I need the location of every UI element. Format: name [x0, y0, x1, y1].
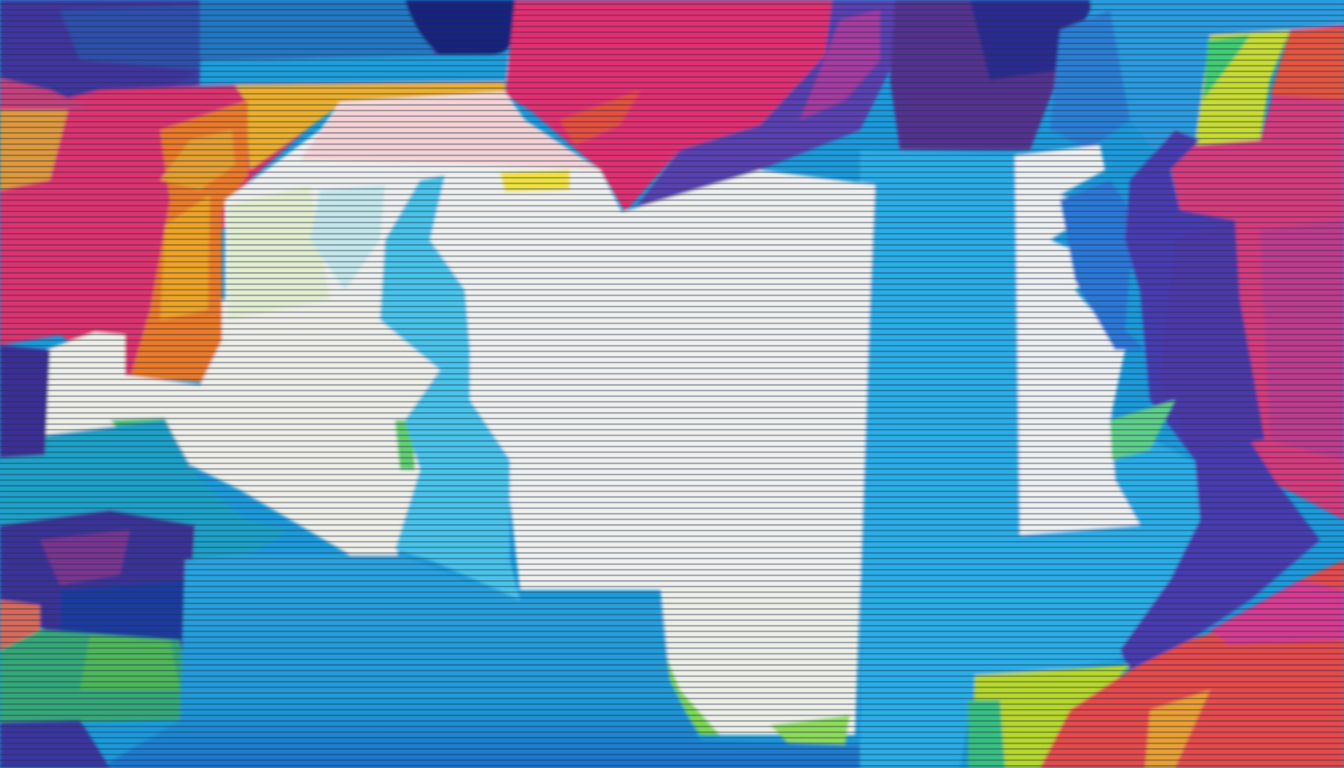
- right purple column: [1120, 130, 1320, 670]
- green lower left: [0, 630, 190, 722]
- lower right yellow green: [970, 665, 1130, 768]
- top pink shape: [505, 0, 832, 212]
- top-left indigo block: [0, 0, 440, 105]
- green right accent: [1110, 400, 1175, 460]
- green edge accents: [660, 640, 720, 735]
- top navy shape: [405, 0, 515, 55]
- lower left purple: [0, 345, 50, 458]
- lower-right cyan mass: [860, 150, 1215, 768]
- central white field: [225, 92, 875, 590]
- pale green tint on white: [228, 185, 330, 320]
- green yellow patch: [1195, 30, 1290, 145]
- blue jagged streaks: [1060, 180, 1175, 350]
- cyan stripe: [200, 55, 508, 84]
- yellow orange bars: [235, 82, 505, 170]
- lower left teal: [0, 420, 290, 570]
- pink tint on white: [300, 94, 600, 170]
- bottom left indigo: [0, 720, 110, 768]
- left pink block: [0, 80, 505, 380]
- lower blue mid: [100, 555, 860, 768]
- top right light blue: [1090, 0, 1344, 170]
- yellow highlight: [500, 170, 570, 192]
- right white strip: [1015, 145, 1140, 535]
- lower right red: [1040, 560, 1344, 768]
- right pink block: [1170, 25, 1344, 520]
- top-center violet block: [890, 0, 1095, 150]
- cyan figure in white: [380, 175, 520, 600]
- orange column: [130, 100, 248, 382]
- purple-blue streak: [630, 0, 900, 215]
